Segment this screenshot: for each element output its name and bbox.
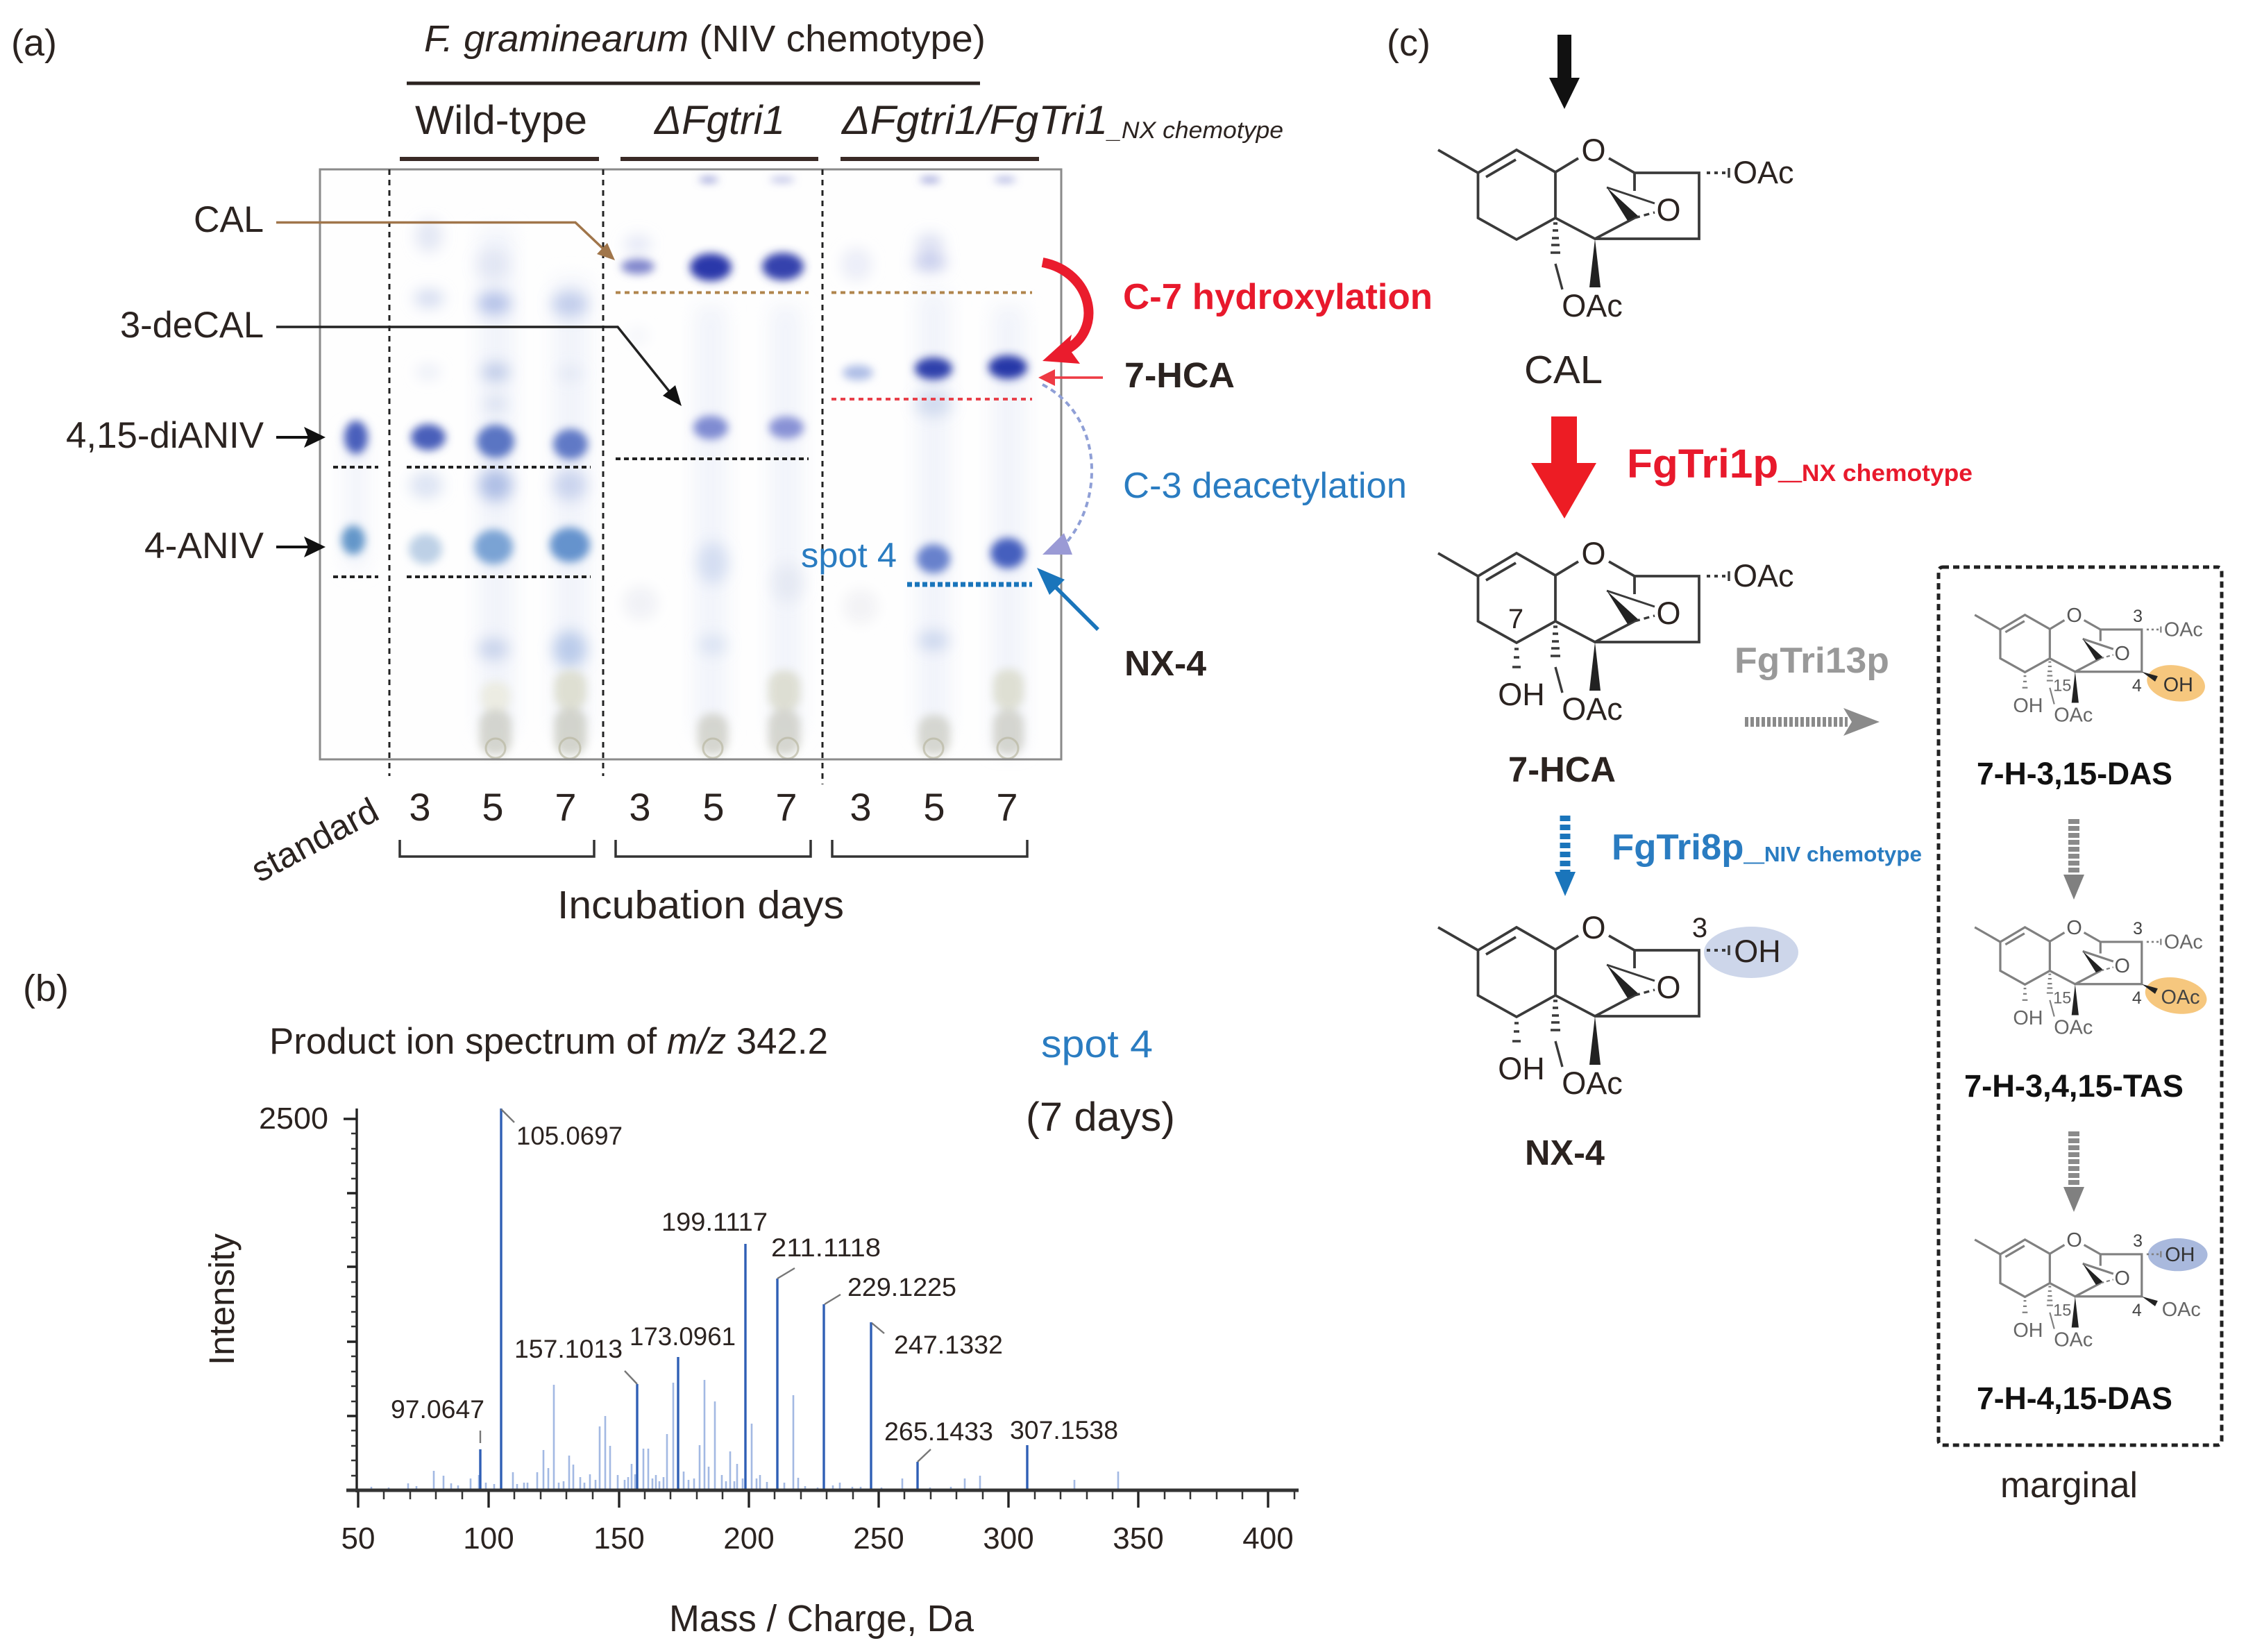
y axis tick label: 2500 <box>259 1102 328 1136</box>
label: 7-HCA: 7-HCA <box>1508 750 1616 789</box>
molecule: 7-HCA: 7 <box>1508 604 1523 634</box>
molecule: 7-H-4,15-DAS: OH <box>2165 1244 2195 1266</box>
molecule: 7-H-3,4,15-TAS: 4 <box>2132 988 2142 1008</box>
TLC plate <box>320 169 1061 759</box>
title bracket line <box>407 82 980 85</box>
molecule: CAL: OAc <box>1562 288 1623 323</box>
column heading: Wild-type: Wild-type <box>415 98 587 143</box>
arrow: top black <box>1549 35 1580 109</box>
arrow: 4,15-diANIV <box>276 427 326 448</box>
x axis tick labels: 50 <box>341 1522 375 1556</box>
label: NX-4: NX-4 <box>1525 1133 1605 1172</box>
molecule: NX-4: OAc <box>1562 1065 1623 1101</box>
arrow: NX-4 <box>1037 568 1098 630</box>
peak labels: 199.1117 <box>661 1208 768 1236</box>
molecule: 7-H-4,15-DAS: 3 <box>2133 1231 2143 1251</box>
day brackets <box>400 840 1027 857</box>
x axis tick labels: 150 <box>593 1522 645 1556</box>
molecule: NX-4: OH <box>1734 934 1781 969</box>
lane day numbers: 5 <box>923 785 945 829</box>
label: FgTri13p: FgTri13p <box>1734 641 1889 681</box>
compound label: CAL: CAL <box>194 199 264 240</box>
molecule: 7-H-4,15-DAS: O <box>2066 1229 2082 1251</box>
column heading: delta Fgtri1: ΔFgtri1 <box>653 98 785 143</box>
arrow: 3-deCAL <box>276 327 682 406</box>
arrow: CAL <box>276 222 615 260</box>
panel label a: (a) <box>11 22 57 64</box>
compound label: 4,15-diANIV: 4,15-diANIV <box>66 415 264 456</box>
label: marginal: marginal <box>2000 1465 2138 1506</box>
lane day numbers: 5 <box>702 785 725 829</box>
heading: F. graminearum NIV chemotype: F. graminearum (NIV chemotype) <box>424 18 986 60</box>
x axis tick labels: 100 <box>463 1522 514 1556</box>
curved arrow: C-7 hydroxylation <box>1042 262 1088 364</box>
column underline bars <box>400 157 1039 161</box>
dotted marker line blue <box>907 582 1032 587</box>
dotted marker lines black <box>333 459 809 577</box>
compound label: 3-deCAL: 3-deCAL <box>120 305 264 346</box>
label: C-3 deacetylation: C-3 deacetylation <box>1123 466 1407 506</box>
axes <box>344 1109 1268 1508</box>
x axis tick labels: 250 <box>853 1522 904 1556</box>
label: 7 days: (7 days) <box>1026 1095 1175 1140</box>
label: 7-H-3,15-DAS: 7-H-3,15-DAS <box>1977 756 2172 791</box>
axis label: Incubation days: Incubation days <box>557 883 844 927</box>
peak labels: 173.0961 <box>630 1322 736 1351</box>
highlight: 3-OH <box>2148 1238 2208 1271</box>
molecule: 7-H-3,4,15-TAS <box>1975 917 2210 1038</box>
lane label: standard: standard <box>244 790 385 890</box>
molecule: 7-H-3,4,15-TAS: 3 <box>2133 919 2143 938</box>
peak labels <box>391 1122 1118 1446</box>
lane day numbers: 5 <box>482 785 504 829</box>
molecule: CAL: O <box>1581 133 1606 168</box>
lane day numbers: 3 <box>409 785 431 829</box>
arrow: grey dashed down <box>2063 1131 2084 1212</box>
x axis tick labels: 350 <box>1113 1522 1164 1556</box>
marginal box <box>1939 567 2222 1445</box>
molecule: 7-H-3,15-DAS: O <box>2066 605 2082 627</box>
label: FgTri1p NX chemotype: FgTri1p_ <box>1627 441 1795 487</box>
panel label c: (c) <box>1387 22 1430 64</box>
panel: (c) biosynthesis pathway <box>1387 22 2222 1506</box>
mass spectrum chart <box>202 1102 1299 1640</box>
label: 7-HCA: 7-HCA <box>1124 355 1235 395</box>
molecule: NX-4: OH <box>1498 1051 1545 1086</box>
molecule: 7-H-4,15-DAS: O <box>2114 1267 2130 1290</box>
molecule: 7-H-4,15-DAS: 4 <box>2132 1301 2142 1320</box>
x axis title: Mass / Charge, Da <box>669 1598 974 1640</box>
molecule: 7-H-4,15-DAS: 15 <box>2053 1301 2071 1320</box>
molecule: CAL <box>1438 133 1794 323</box>
dotted marker lines brown <box>616 292 1032 294</box>
y axis title: Intensity <box>202 1233 242 1365</box>
arrow: 7-HCA <box>1038 369 1103 386</box>
label: FgTri8p NIV chemotype: NIV chemotype <box>1764 842 1922 866</box>
molecule: NX-4: 3 <box>1692 913 1707 943</box>
molecule: 7-H-3,15-DAS: OAc <box>2164 619 2203 641</box>
baseline noise peaks <box>371 1474 951 1490</box>
arrow: FgTri1p red <box>1531 416 1596 519</box>
x axis tick labels: 400 <box>1242 1522 1294 1556</box>
label: FgTri1p NX chemotype: NX chemotype <box>1802 460 1973 487</box>
panel: (b) product ion spectrum <box>23 968 1299 1640</box>
panel label b: (b) <box>23 968 69 1009</box>
molecule: 7-H-3,4,15-TAS: O <box>2114 955 2130 977</box>
axis minor ticks <box>351 1133 1294 1499</box>
lane day numbers: 7 <box>555 785 577 829</box>
molecule: 7-H-3,15-DAS: OH <box>2163 674 2193 696</box>
panel: (a) TLC plate figure <box>11 18 1433 927</box>
column heading: complemented strain: _NX chemotype <box>1106 117 1283 144</box>
molecule: 7-H-4,15-DAS: OAc <box>2162 1299 2201 1321</box>
molecule: 7-H-3,4,15-TAS: OAc <box>2164 932 2203 954</box>
peak labels: 105.0697 <box>516 1122 623 1150</box>
molecule: 7-HCA: OAc <box>1562 691 1623 727</box>
molecule: NX-4 <box>1438 910 1798 1101</box>
x axis tick labels <box>341 1522 1294 1556</box>
molecule: 7-H-3,4,15-TAS: OH <box>2013 1007 2043 1029</box>
molecule: 7-H-3,4,15-TAS: 15 <box>2053 989 2071 1007</box>
major peaks <box>480 1109 1027 1490</box>
peak labels: 211.1118 <box>771 1233 881 1262</box>
column heading: complemented strain: ΔFgtri1/FgTri1 <box>841 98 1108 143</box>
molecule: 7-HCA: OAc <box>1733 558 1794 593</box>
lane day numbers: 7 <box>996 785 1018 829</box>
minor peaks <box>408 1380 1118 1490</box>
label: CAL: CAL <box>1524 348 1603 392</box>
molecule: NX-4: O <box>1581 910 1606 945</box>
molecule: 7-H-3,4,15-TAS: OAc <box>2161 986 2200 1009</box>
molecule: 7-H-3,15-DAS: 4 <box>2132 676 2142 696</box>
vertical lane dividers <box>389 169 822 784</box>
molecule: 7-HCA <box>1438 536 1794 727</box>
arrow: 4-ANIV <box>276 537 326 557</box>
molecule: 7-H-4,15-DAS <box>1975 1229 2208 1351</box>
molecule: 7-HCA: O <box>1581 536 1606 571</box>
lane day numbers <box>409 785 1018 829</box>
molecule: 7-H-3,15-DAS <box>1975 605 2208 726</box>
molecule: 7-H-3,15-DAS: 15 <box>2053 677 2071 695</box>
label: spot 4: spot 4 <box>1041 1022 1153 1065</box>
label leader lines <box>480 1109 931 1462</box>
peak labels: 229.1225 <box>847 1273 956 1301</box>
molecule: 7-H-3,15-DAS: OH <box>2013 695 2043 717</box>
lane day numbers: 7 <box>775 785 797 829</box>
peak labels: 97.0647 <box>391 1395 484 1424</box>
arrow: FgTri13p grey dashed <box>1745 708 1880 736</box>
label: FgTri8p NIV chemotype: FgTri8p_ <box>1612 827 1762 868</box>
molecule: 7-H-3,15-DAS: OAc <box>2054 704 2093 726</box>
highlight: 3-OH <box>1704 927 1798 978</box>
molecule: CAL: O <box>1656 192 1681 228</box>
molecule: 7-HCA: O <box>1656 596 1681 631</box>
dotted curved arrow: C-3 deacetylation <box>1042 385 1092 555</box>
x axis baseline <box>346 1488 1299 1492</box>
molecule: 7-H-3,15-DAS: 3 <box>2133 607 2143 626</box>
molecule: 7-H-3,15-DAS: O <box>2114 643 2130 665</box>
arrow: grey dashed down <box>2063 819 2084 900</box>
dotted marker line red <box>831 398 1032 401</box>
peak labels: 265.1433 <box>884 1417 993 1446</box>
highlight: 4-OAc <box>2143 972 2210 1018</box>
label: 7-H-3,4,15-TAS: 7-H-3,4,15-TAS <box>1964 1068 2184 1104</box>
lane day numbers: 3 <box>850 785 872 829</box>
peak labels: 247.1332 <box>894 1331 1003 1359</box>
molecule: CAL: OAc <box>1733 155 1794 190</box>
peak labels: 307.1538 <box>1010 1416 1118 1444</box>
peak labels: 157.1013 <box>514 1335 623 1363</box>
molecule: NX-4: O <box>1656 970 1681 1005</box>
molecule: 7-H-3,4,15-TAS: OAc <box>2054 1016 2093 1038</box>
label: C-7 hydroxylation: C-7 hydroxylation <box>1123 277 1433 317</box>
x axis tick labels: 300 <box>983 1522 1034 1556</box>
label: 7-H-4,15-DAS: 7-H-4,15-DAS <box>1977 1381 2172 1416</box>
molecule: 7-H-4,15-DAS: OH <box>2013 1320 2043 1342</box>
label: NX-4: NX-4 <box>1124 643 1207 683</box>
chart title: Product ion spectrum of m/z 342.2 <box>269 1021 828 1062</box>
molecule: 7-H-4,15-DAS: OAc <box>2054 1329 2093 1351</box>
molecule: 7-HCA: OH <box>1498 677 1545 712</box>
molecule: 7-H-3,4,15-TAS: O <box>2066 917 2082 939</box>
x axis tick labels: 200 <box>723 1522 775 1556</box>
highlight: 4-OH <box>2144 661 2208 706</box>
arrow: FgTri8p blue dashed <box>1555 816 1576 896</box>
label: spot 4: spot 4 <box>801 536 897 575</box>
lane day numbers: 3 <box>629 785 651 829</box>
compound label: 4-ANIV: 4-ANIV <box>144 525 264 566</box>
